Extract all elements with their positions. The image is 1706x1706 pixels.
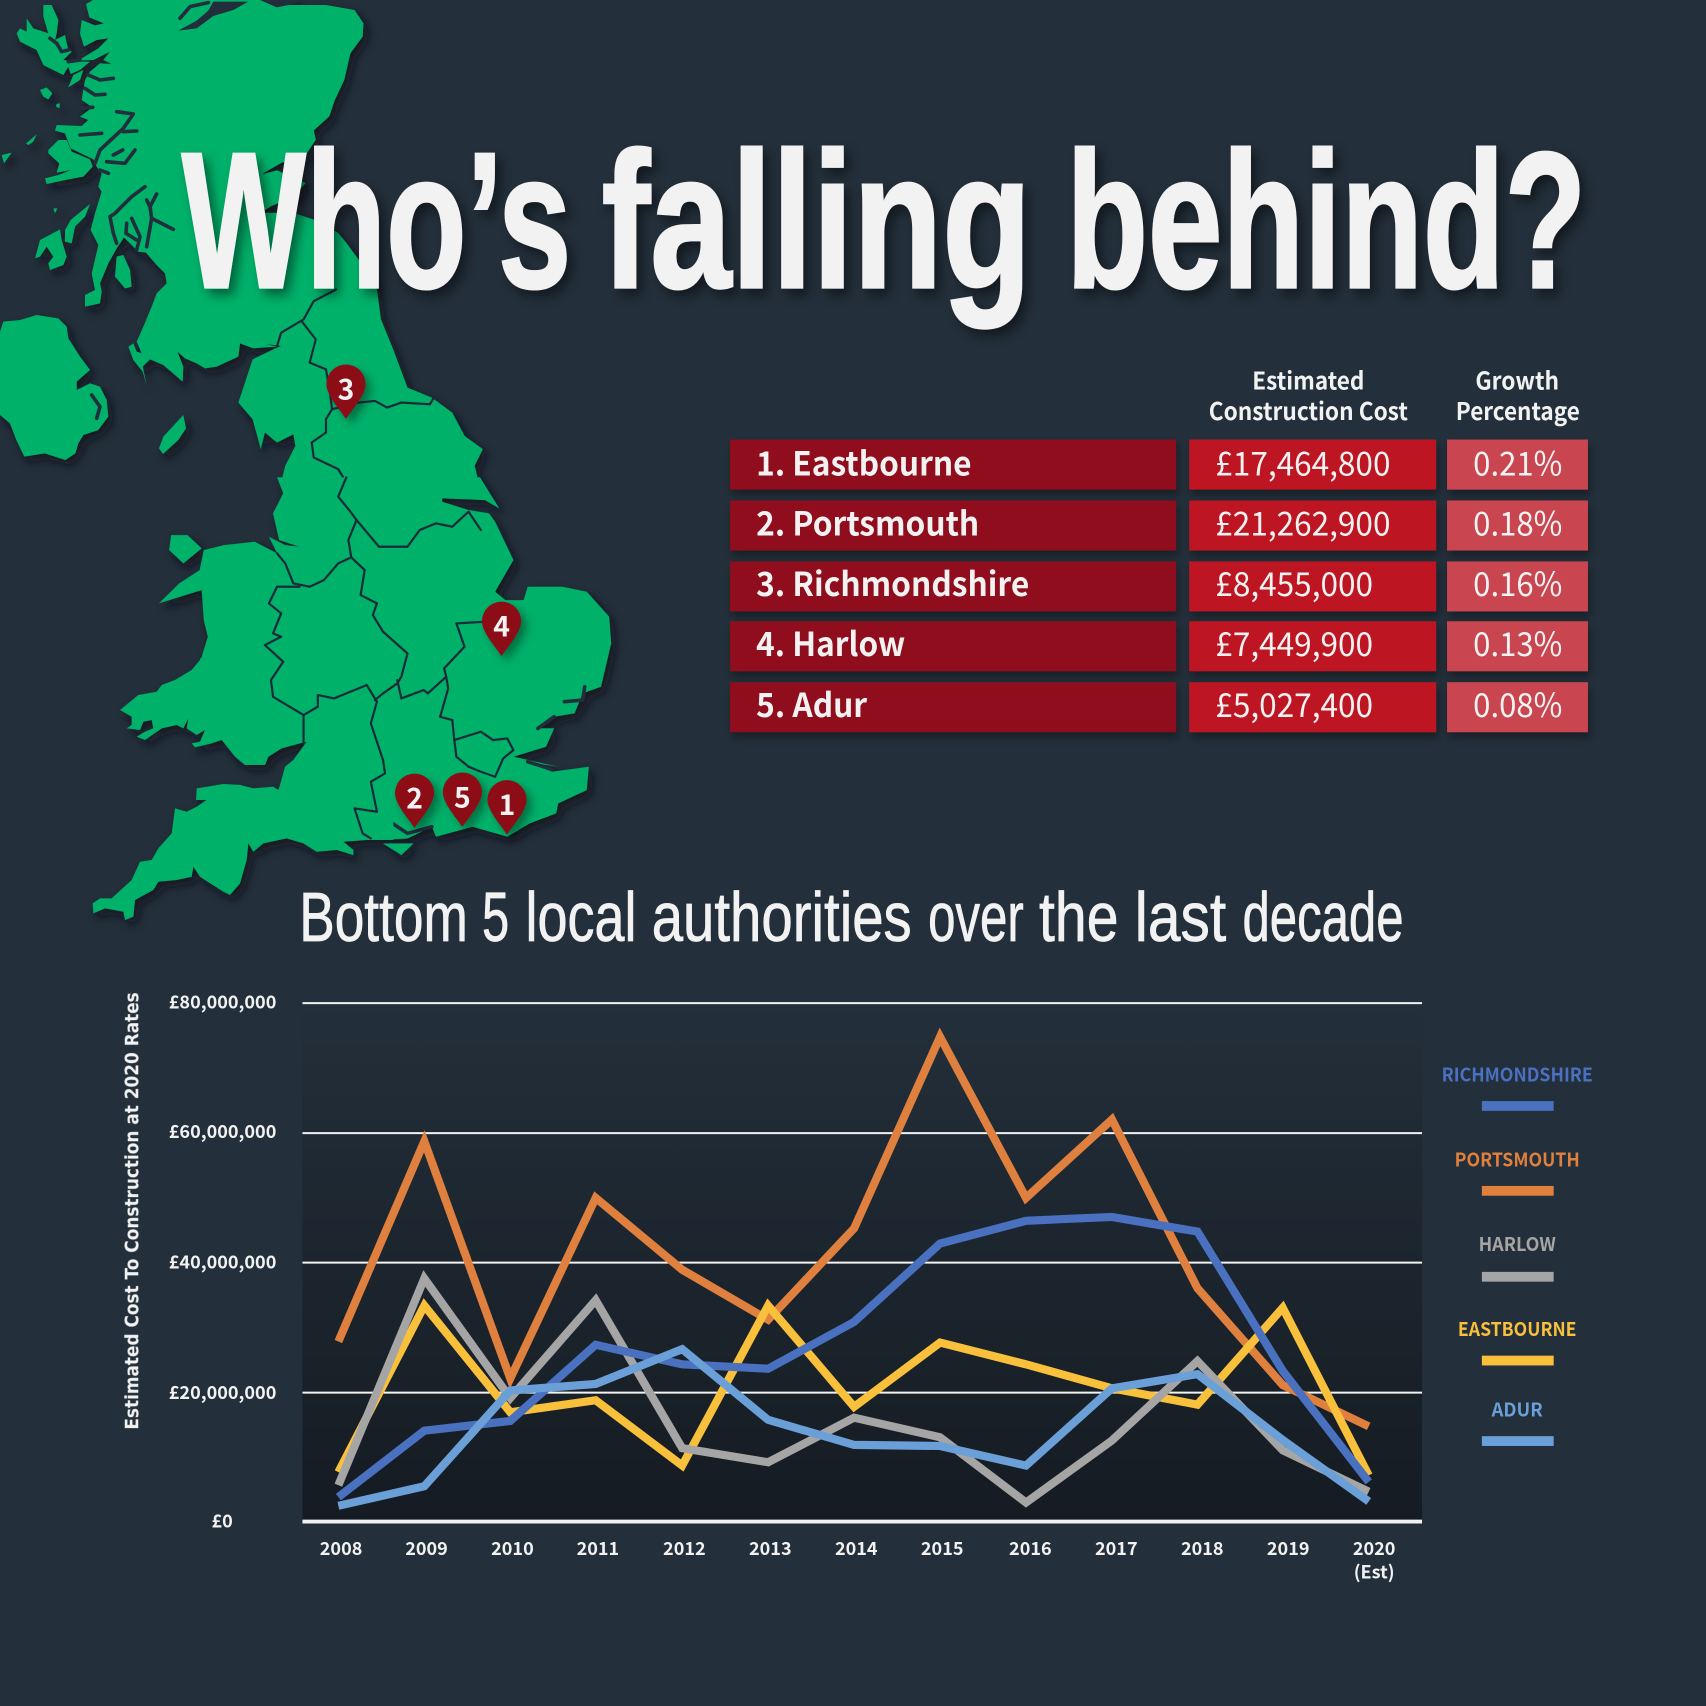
- legend: Adur: [1482, 1396, 1554, 1446]
- chart heading: authorities: [652, 878, 912, 956]
- row 4: £7,449,900: [1215, 618, 1373, 666]
- x axis labels: 2019: [1267, 1535, 1310, 1561]
- row 3: 3. Richmondshire: [756, 558, 1029, 606]
- row 5: £5,027,400: [1215, 679, 1373, 727]
- y axis labels: £0: [212, 1508, 233, 1534]
- x axis labels: 2020: [1353, 1535, 1395, 1561]
- x axis labels: [320, 1535, 1395, 1585]
- pin 1: [487, 780, 527, 835]
- x axis labels: 2014: [835, 1535, 878, 1561]
- row 4: [730, 618, 1588, 671]
- row 1: [730, 437, 1588, 490]
- x axis labels: 2015: [921, 1535, 964, 1561]
- legend: Portsmouth: [1455, 1145, 1580, 1196]
- x axis labels: 2009: [405, 1535, 448, 1561]
- x axis labels: 2013: [749, 1535, 792, 1561]
- y axis labels: £40,000,000: [169, 1249, 276, 1275]
- map of the UK with regional boundaries: [0, 0, 611, 920]
- row 5: 5. Adur: [756, 679, 868, 727]
- chart heading: [299, 878, 1404, 956]
- line: Harlow: [338, 1278, 1369, 1503]
- pin 5: 5: [454, 775, 471, 816]
- row 2: 0.18%: [1473, 497, 1562, 545]
- x axis labels: 2008: [320, 1535, 362, 1561]
- x axis labels: 2017: [1095, 1535, 1138, 1561]
- column heading: growth percentage: [1456, 363, 1580, 428]
- row 3: [730, 558, 1588, 611]
- chart heading: local: [526, 878, 636, 956]
- legend: Eastbourne: [1458, 1315, 1577, 1365]
- pin 2: 2: [406, 776, 423, 817]
- row 2: £21,262,900: [1215, 497, 1390, 545]
- pin 3: 3: [338, 367, 354, 408]
- row 1: 0.21%: [1473, 437, 1562, 485]
- pin 5: [443, 772, 482, 827]
- column heading: estimated construction cost: Construction Cost: [1209, 393, 1408, 428]
- column heading: estimated construction cost: Estimated: [1252, 363, 1364, 398]
- x axis labels: (Est): [1354, 1559, 1395, 1585]
- title: falling: [602, 113, 1031, 329]
- column heading: growth percentage: Percentage: [1456, 393, 1580, 428]
- x axis labels: 2011: [577, 1535, 619, 1561]
- column heading: growth percentage: Growth: [1475, 363, 1559, 398]
- legend: Harlow: HARLOW: [1479, 1230, 1556, 1257]
- pin 1: 1: [499, 783, 515, 824]
- grid lines: [302, 1003, 1422, 1522]
- pin 4: 4: [493, 604, 510, 645]
- row 4: 0.13%: [1473, 618, 1562, 666]
- y axis labels: [169, 989, 276, 1534]
- row 5: [730, 679, 1588, 732]
- chart heading: the: [1039, 878, 1118, 956]
- x axis labels: 2010: [491, 1535, 534, 1561]
- chart heading: decade: [1243, 878, 1404, 956]
- line chart: [122, 989, 1422, 1585]
- title: Who’s: [182, 113, 571, 329]
- y axis title: Estimated Cost To Construction at 2020 Rates: [122, 992, 143, 1430]
- chart heading: Bottom: [299, 878, 468, 956]
- row 4: 4. Harlow: [756, 618, 905, 666]
- column heading: estimated construction cost: [1209, 363, 1408, 428]
- legend: Richmondshire: RICHMONDSHIRE: [1442, 1060, 1593, 1087]
- x axis labels: 2012: [663, 1535, 706, 1561]
- row 1: 1. Eastbourne: [756, 437, 972, 485]
- line: Portsmouth: [338, 1037, 1369, 1426]
- line: Adur: [338, 1349, 1369, 1506]
- y axis labels: £20,000,000: [169, 1379, 276, 1405]
- pin 4: [482, 602, 521, 656]
- legend: Harlow: [1479, 1230, 1556, 1282]
- chart heading: last: [1135, 878, 1226, 956]
- x axis labels: 2016: [1009, 1535, 1052, 1561]
- legend: Portsmouth: PORTSMOUTH: [1455, 1145, 1580, 1172]
- y axis labels: £80,000,000: [169, 989, 276, 1015]
- title: [182, 113, 1586, 329]
- row 3: £8,455,000: [1215, 558, 1373, 606]
- row 5: 0.08%: [1473, 679, 1562, 727]
- legend: Richmondshire: [1442, 1060, 1593, 1111]
- legend: Eastbourne: EASTBOURNE: [1458, 1315, 1577, 1342]
- row 1: £17,464,800: [1215, 437, 1390, 485]
- pin 2: [395, 774, 434, 828]
- line: Richmondshire: [338, 1217, 1369, 1497]
- row 2: [730, 497, 1588, 551]
- chart heading: over: [928, 878, 1024, 956]
- pin 3: [326, 364, 366, 419]
- line: Eastbourne: [338, 1306, 1369, 1475]
- row 2: 2. Portsmouth: [756, 497, 979, 545]
- chart heading: 5: [482, 878, 509, 956]
- y axis labels: £60,000,000: [169, 1118, 276, 1144]
- x axis labels: 2018: [1181, 1535, 1224, 1561]
- plot background: [302, 1003, 1422, 1521]
- legend: Adur: ADUR: [1491, 1396, 1543, 1423]
- legend: [1442, 1060, 1593, 1446]
- table of bottom five authorities: [730, 363, 1588, 732]
- row 3: 0.16%: [1473, 558, 1562, 606]
